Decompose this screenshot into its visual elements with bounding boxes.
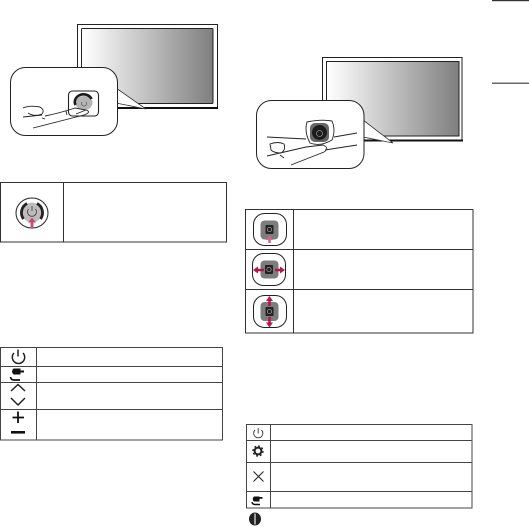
icon: note marker — [249, 512, 261, 526]
icon: joystick press up — [254, 214, 286, 246]
icon: up and down chevrons — [11, 384, 25, 405]
table: menu icons, right — [246, 424, 472, 508]
icon: power — [12, 350, 25, 363]
table: menu icons, left — [0, 348, 222, 440]
zoom pointer — [116, 88, 146, 109]
icon: settings gear — [253, 446, 263, 456]
zoom pointer — [363, 120, 393, 143]
zoom bubble — [256, 100, 364, 168]
icon: joystick up and down — [254, 296, 286, 328]
icon: input source — [252, 496, 262, 504]
margin rules — [492, 0, 529, 84]
icon: power — [254, 428, 263, 438]
icon: plus and minus — [12, 412, 24, 423]
monitor frame — [322, 58, 463, 142]
illustration: monitor with joystick button, right — [256, 58, 463, 168]
illustration: monitor with power button, left — [10, 24, 218, 136]
icon: round power button with up arrow — [16, 198, 48, 228]
icon: input source — [10, 368, 24, 380]
icon: joystick left and right — [252, 254, 286, 286]
icon: minus — [11, 431, 25, 434]
table: single power button, left — [0, 182, 226, 242]
icon: close — [254, 472, 264, 482]
table: joystick actions, right — [246, 210, 473, 333]
zoom bubble — [10, 68, 118, 136]
monitor frame — [78, 24, 218, 109]
